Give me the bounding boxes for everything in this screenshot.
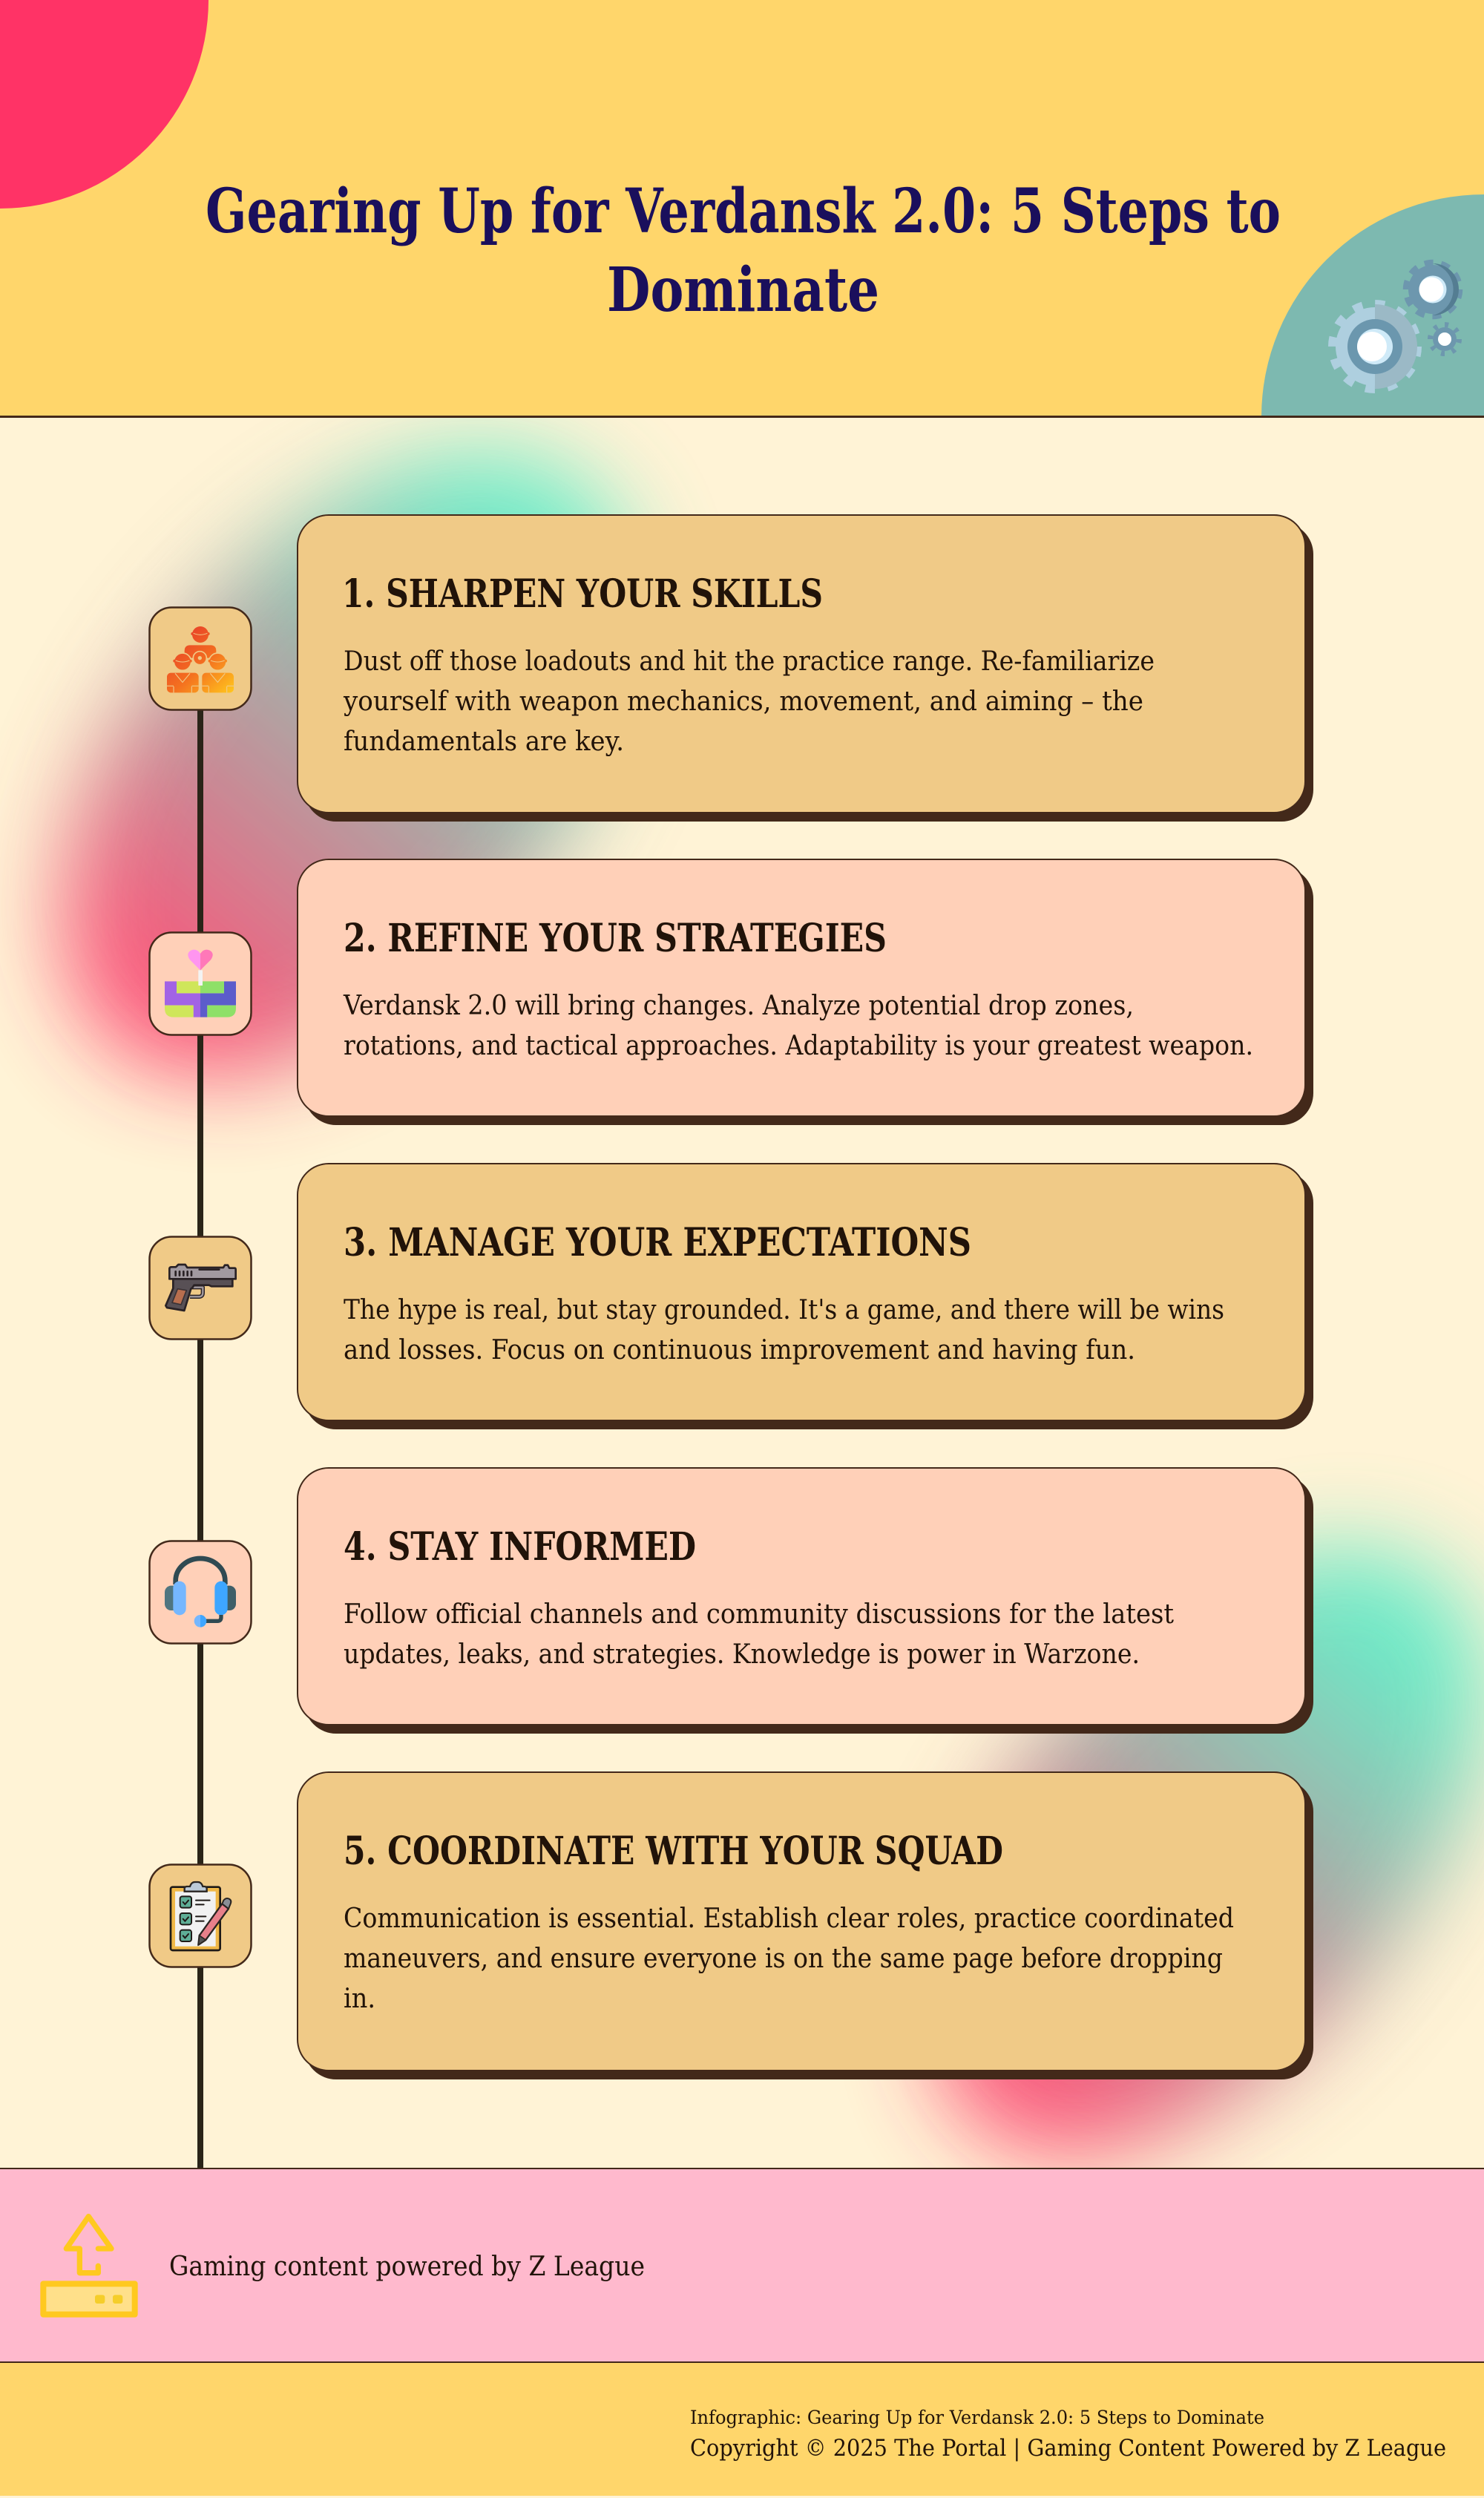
background blurred colour blobs xyxy=(0,347,1484,2253)
text: step 1 body: Dust off those loadouts and hit the practice range. Re-familiarize xyxy=(344,646,1155,677)
decorative pink circle xyxy=(0,0,209,209)
text: step 2 body: rotations, and tactical approaches. Adaptability is your greatest weapon. xyxy=(344,1031,1253,1061)
title xyxy=(206,176,1281,326)
icon: upload arrow over device xyxy=(43,2217,135,2315)
step 4 xyxy=(150,1468,1305,1725)
step 2 xyxy=(150,859,1305,1116)
icon: small gear xyxy=(1431,325,1459,353)
step 3 xyxy=(150,1164,1305,1420)
text: step 2 body: Verdansk 2.0 will bring changes. Analyze potential drop zones, xyxy=(343,991,1134,1021)
footer text: Copyright © 2025 The Portal | Gaming Content Powered by Z League xyxy=(690,2435,1446,2462)
text: step 5 body xyxy=(344,1904,1234,2014)
panel: step 2 card xyxy=(298,859,1305,1116)
heading: step 1: 1. SHARPEN YOUR SKILLS xyxy=(342,571,823,617)
panel: step 5 card xyxy=(298,1772,1305,2071)
text: step 2 body xyxy=(343,991,1253,1061)
title: Dominate xyxy=(607,255,879,326)
icon: pistol xyxy=(150,1236,251,1339)
text: step 5 body: in. xyxy=(344,1984,375,2014)
heading: step 4: 4. STAY INFORMED xyxy=(344,1524,696,1570)
text: step 4 body: Follow official channels and community discussions for the latest xyxy=(344,1599,1174,1630)
text: step 1 body: yourself with weapon mechanics, movement, and aiming – the xyxy=(343,686,1143,717)
footer text: Infographic: Gearing Up for Verdansk 2.0: 5 Steps to Dominate xyxy=(690,2407,1264,2428)
step 5 xyxy=(150,1772,1305,2071)
panel: step 4 card xyxy=(298,1468,1305,1725)
text: step 4 body: updates, leaks, and strategies. Knowledge is power in Warzone. xyxy=(344,1639,1140,1670)
icon: large gear xyxy=(1333,304,1417,389)
footer text xyxy=(690,2407,1446,2462)
text: step 3 body: The hype is real, but stay grounded. It's a game, and there will be wins xyxy=(344,1295,1224,1325)
sponsor band xyxy=(0,2168,1484,2363)
panel: step 1 card xyxy=(298,515,1305,813)
text: step 4 body xyxy=(344,1599,1174,1670)
sponsor text: Gaming content powered by Z League xyxy=(169,2252,645,2282)
heading: step 5: 5. COORDINATE WITH YOUR SQUAD xyxy=(344,1829,1003,1874)
icon: medium gear xyxy=(1405,263,1460,316)
text: step 5 body: Communication is essential. Establish clear roles, practice coordinated xyxy=(344,1904,1234,1934)
timeline line xyxy=(197,705,203,2168)
text: step 3 body: and losses. Focus on continuous improvement and having fun. xyxy=(344,1335,1135,1366)
text: step 5 body: maneuvers, and ensure everyone is on the same page before dropping xyxy=(344,1944,1223,1974)
decorative teal circle with gears icon xyxy=(1261,194,1484,416)
icon: joystick xyxy=(150,932,251,1035)
panel: step 3 card xyxy=(298,1164,1305,1420)
icon: headset xyxy=(150,1541,251,1643)
footer band xyxy=(0,2363,1484,2496)
text: step 3 body xyxy=(344,1295,1224,1366)
heading: step 3: 3. MANAGE YOUR EXPECTATIONS xyxy=(344,1220,971,1265)
text: step 1 body: fundamentals are key. xyxy=(344,727,624,757)
heading: step 2: 2. REFINE YOUR STRATEGIES xyxy=(344,916,887,961)
header band xyxy=(0,0,1484,640)
icon: checklist clipboard and pencil xyxy=(150,1864,251,1967)
step 1 xyxy=(150,515,1305,813)
text: step 1 body xyxy=(343,646,1155,757)
icon: team of three people xyxy=(150,607,251,709)
